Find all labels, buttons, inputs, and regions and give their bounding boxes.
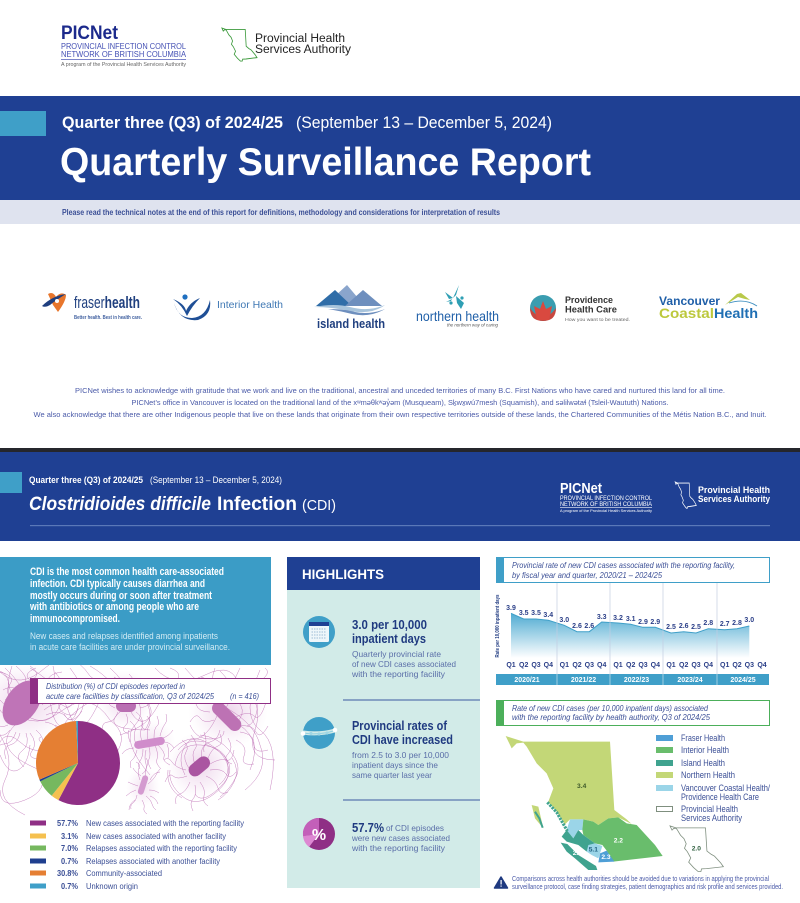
panel: CDI intro: in acute care facilities are under provincial surveillance. [30, 642, 230, 652]
logo: PICNet: PROVINCIAL INFECTION CONTROL [61, 41, 186, 51]
logo: Fraser Health: Better health. Best in health care. [74, 315, 143, 321]
quarter labels: Q3 [531, 662, 541, 669]
technical notes strip: Please read the technical notes at the end of this report for definitions, methodology and considerations for interpretation of results [62, 208, 500, 217]
cover banner [0, 96, 800, 200]
panel: CDI intro [0, 557, 271, 665]
legend row: community [30, 868, 162, 878]
logo: PHSA white: Provincial Health [698, 485, 770, 496]
region: Vancouver Island [561, 843, 597, 870]
quarter labels: Q4 [651, 662, 660, 669]
data labels: 2.6 [584, 623, 594, 630]
quarter labels: Q3 [638, 662, 648, 669]
legend: Fraser: Fraser Health [681, 733, 725, 743]
fiscal year bar: 2020/21 [514, 677, 540, 684]
legend row: unknown: 0.7% [61, 881, 78, 891]
quarter labels: Q2 [679, 662, 688, 669]
highlight: rate increase: inpatient days since the [352, 760, 438, 770]
region: Northern Health [506, 736, 632, 825]
legend row: new another: New cases associated with another facility [86, 831, 227, 841]
curls: lower right cell [164, 732, 236, 811]
legend row: community: Community-associated [86, 868, 162, 878]
fiscal year bar: 2021/22 [571, 677, 596, 684]
highlights heading: HIGHLIGHTS [302, 566, 384, 582]
line chart title: Provincial rate of new CDI cases associated with the reporting facility, [512, 560, 735, 570]
map labels: 2.3 [601, 854, 611, 861]
map labels: 2.3 [573, 850, 582, 857]
panel: CDI intro: mostly occurs during or soon after treatment [30, 590, 212, 602]
quarter labels: Q1 [506, 662, 516, 669]
data labels: 2.6 [679, 623, 689, 630]
legend: Northern: Northern Health [681, 770, 735, 780]
region: Fraser Health [598, 851, 614, 862]
legend: Interior: Interior Health [681, 745, 729, 755]
page divider [0, 448, 800, 452]
warning note [494, 874, 783, 891]
logo: PICNet white: PROVINCIAL INFECTION CONTROL [560, 496, 653, 502]
legend row: unknown [30, 881, 138, 891]
icon: trend line [301, 717, 337, 749]
logo: Provincial Health Services Authority: Services Authority [255, 44, 351, 56]
highlight: quarterly rate: 3.0 per 10,000 [352, 617, 427, 632]
legend row: relapse another [30, 856, 221, 866]
area chart [495, 583, 769, 685]
line chart title: by fiscal year and quarter, 2020/21 – 2024/25 [512, 570, 662, 580]
legend row: new another: 3.1% [61, 831, 78, 841]
region: Vancouver Coastal north [567, 819, 583, 838]
map: BC health authorities [506, 736, 723, 871]
panel: CDI intro: CDI is the most common health care-associated [30, 566, 224, 578]
panel: CDI intro: infection. CDI typically causes diarrhea and [30, 578, 205, 590]
quarter labels: Q3 [585, 662, 594, 669]
logo: Interior Health: Interior Health [217, 299, 283, 311]
quarter labels: Q4 [544, 662, 553, 669]
small map: PHSA: 2.0 [692, 845, 701, 852]
data labels: 2.5 [691, 624, 701, 631]
quarter labels: Q2 [732, 662, 742, 669]
area series [511, 613, 749, 658]
legend row: relapse reporting: 7.0% [61, 843, 78, 853]
legend row: relapse another: Relapses associated with another facility [86, 856, 221, 866]
curls: centre cell [122, 714, 174, 774]
logo: PHSA white: Services Authority [698, 494, 771, 505]
small map: PHSA [670, 826, 723, 871]
fiscal year bar: 2023/24 [677, 677, 703, 684]
map labels: 3.4 [577, 783, 587, 790]
y axis label: Rate per 10,000 inpatient days [495, 594, 501, 658]
section title: Clostridioides difficile [29, 494, 211, 515]
quarter labels: Q1 [666, 662, 676, 669]
technical notes strip [0, 200, 800, 224]
highlight: share of episodes: of CDI episodes [386, 823, 444, 833]
legend: Vancouver Coastal: Vancouver Coastal Health/ [681, 783, 770, 793]
quarter labels [506, 662, 767, 669]
highlight: quarterly rate: Quarterly provincial rate [352, 649, 441, 659]
panel: CDI intro: with antibiotics or among people who are [29, 601, 199, 613]
quarter labels: Q1 [613, 662, 623, 669]
curls: top cell [97, 674, 162, 734]
data labels: 3.2 [613, 615, 623, 622]
logo: PICNet white: A program of the Provincial Health Services Authority [560, 508, 652, 513]
highlight: share of episodes: were new cases associated [351, 833, 450, 843]
data labels: 3.5 [531, 610, 541, 617]
data labels: 3.4 [543, 612, 553, 619]
logo: Interior Health [173, 294, 283, 320]
highlight: rate increase [352, 718, 453, 780]
quarter line: Quarter three (Q3) of 2024/25 [29, 475, 143, 485]
quarter line [29, 475, 282, 485]
quarter labels: Q4 [704, 662, 713, 669]
region: Vancouver Coastal south [587, 843, 602, 858]
pie chart title [30, 678, 270, 704]
bacteria cells [0, 673, 244, 795]
cover banner: (September 13 – December 5, 2024) [296, 113, 552, 132]
quarter labels: Q3 [691, 662, 701, 669]
fiscal year bar: 2024/25 [730, 677, 756, 684]
legend: Island: Island Health [681, 758, 725, 768]
highlight: quarterly rate: inpatient days [352, 631, 426, 646]
line chart title [496, 557, 770, 583]
legend row: relapse reporting: Relapses associated with the reporting facility [86, 843, 238, 853]
logo: Vancouver Coastal Health: Health [714, 305, 758, 321]
data labels: 3.3 [597, 614, 607, 621]
data labels: 2.9 [638, 619, 648, 626]
legend row: unknown: Unknown origin [86, 881, 138, 891]
logo: Providence Health Care [530, 295, 630, 322]
icon: warning triangle [494, 877, 508, 888]
data labels: 3.0 [744, 617, 754, 624]
legend row: relapse reporting [30, 843, 238, 853]
legend row: new reporting: 57.7% [57, 818, 78, 828]
highlight: rate increase: Provincial rates of [352, 718, 448, 733]
logo: Fraser Health: fraserhealth [74, 293, 140, 312]
land acknowledgement [34, 386, 766, 419]
section title [29, 494, 336, 515]
pie legend [30, 818, 245, 891]
map labels [573, 783, 623, 861]
highlight: share of episodes [351, 820, 450, 853]
data labels: 2.6 [572, 623, 582, 630]
legend row: new another [30, 831, 227, 841]
logo: Fraser Health [42, 293, 143, 321]
highlight: quarterly rate: with the reporting facility [351, 669, 446, 679]
quarter labels: Q1 [560, 662, 569, 669]
quarter labels: Q3 [745, 662, 754, 669]
logo: Northern Health: northern health [416, 308, 499, 324]
data labels: 2.8 [732, 620, 742, 627]
highlight: quarterly rate: of new CDI cases associated [352, 659, 456, 669]
logo: PICNet: PICNet [61, 23, 119, 44]
region: Central coast Island Health [547, 802, 567, 831]
data labels: 3.1 [626, 616, 636, 623]
map labels: 2.2 [614, 837, 623, 844]
highlight: rate increase: same quarter last year [352, 770, 432, 780]
region: Haida Gwaii [532, 805, 543, 828]
highlights heading [287, 557, 480, 590]
panel: CDI intro: immunocompromised. [30, 613, 120, 625]
highlight: share of episodes: 57.7% [352, 820, 384, 835]
pie chart title: Distribution (%) of CDI episodes reported in [46, 681, 185, 691]
icon: percent pie [303, 818, 335, 850]
section title: Infection [217, 494, 297, 515]
logo: PICNet white: PICNet [560, 480, 602, 497]
data labels: 3.9 [506, 605, 516, 612]
panel: highlights [287, 557, 480, 888]
legend: Vancouver Coastal: Providence Health Care [681, 792, 759, 802]
legend row: new reporting [30, 818, 245, 828]
quarter labels: Q2 [626, 662, 635, 669]
soft density behind filaments [0, 661, 268, 807]
pie chart [36, 721, 120, 805]
bacteria background illustration [0, 659, 275, 815]
highlight: rate increase: CDI have increased [352, 732, 453, 747]
land acknowledgement: PICNet’s office in Vancouver is located on the traditional land of the xʷməθkʷəy̓əm (Musqueam), Sḵwx̱wú7mesh (Squamish), and səlilwətaɬ (Tsleil-Waututh) Nations. [132, 398, 668, 407]
logo: PICNet: NETWORK OF BRITISH COLUMBIA [61, 49, 186, 59]
fiscal year bar: 2022/23 [624, 677, 649, 684]
quarter labels: Q1 [720, 662, 729, 669]
legend: PHSA: Provincial Health [681, 804, 738, 814]
logo: Island Health: island health [317, 317, 385, 331]
quarter labels: Q4 [757, 662, 767, 669]
highlight: share of episodes: with the reporting facility [351, 843, 446, 853]
curls: bottom cell [126, 758, 160, 814]
region: Interior Health [582, 817, 663, 862]
logo: Providence Health Care: Providence [565, 295, 613, 305]
logo: Providence Health Care: Health Care [565, 304, 617, 314]
curls: right cell [186, 671, 268, 764]
map labels: 5.1 [589, 847, 598, 854]
cover banner: Quarterly Surveillance Report [60, 141, 591, 184]
logo: PICNet [61, 23, 186, 68]
legend row: new reporting: New cases associated with the reporting facility [86, 818, 245, 828]
quarter labels: Q4 [597, 662, 606, 669]
region: Island Health mainland [562, 830, 595, 852]
data labels: 2.9 [650, 619, 660, 626]
legend row: relapse another: 0.7% [61, 856, 78, 866]
land acknowledgement: PICNet wishes to acknowledge with gratitude that we work and live on the traditional, ancestral and unceded territories of many B.C. First Nations who have cared and nurtured this land for all time. [75, 386, 725, 395]
icon: percent pie: % [312, 827, 326, 844]
legend: PHSA: Services Authority [681, 813, 742, 823]
data labels [506, 605, 754, 631]
land acknowledgement: We also acknowledge that there are other Indigenous people that live on these lands that originate from their own respective territories outside of these lands, the Chartered Communities of the Métis Nation B.C., and Inuit. [34, 410, 766, 419]
logo: PICNet white [560, 480, 653, 513]
logo: Northern Health [416, 285, 499, 328]
cover banner: Quarter three (Q3) of 2024/25 [62, 113, 283, 132]
logo: PICNet white: NETWORK OF BRITISH COLUMBIA [560, 502, 652, 508]
data labels: 2.7 [720, 621, 730, 628]
data labels: 2.5 [666, 624, 676, 631]
icon: calendar [303, 616, 335, 648]
pie chart title: acute care facilities by classification, Q3 of 2024/25 [46, 691, 214, 701]
logo: Island Health [314, 285, 385, 331]
highlight: quarterly rate [351, 617, 456, 679]
logo: Vancouver Coastal Health: Vancouver [659, 294, 720, 308]
logo: PICNet: A program of the Provincial Health Services Authority [61, 62, 186, 68]
highlight: rate increase: from 2.5 to 3.0 per 10,000 [352, 750, 449, 760]
legend row: community: 30.8% [57, 868, 78, 878]
pie chart title: (n = 416) [230, 691, 259, 701]
map legend [656, 733, 770, 823]
data labels: 3.0 [559, 617, 569, 624]
logo: Northern Health: the northern way of caring [447, 322, 498, 328]
data labels: 2.8 [703, 620, 713, 627]
data labels: 3.5 [519, 610, 529, 617]
section title: (CDI) [302, 497, 336, 514]
logo: Provincial Health Services Authority [222, 28, 351, 61]
map title: Rate of new CDI cases (per 10,000 inpatient days) associated [512, 703, 708, 713]
logo: Vancouver Coastal Health: Coastal [659, 305, 714, 321]
quarter labels: Q2 [519, 662, 528, 669]
map title [496, 700, 770, 726]
quarter line: (September 13 – December 5, 2024) [150, 475, 282, 485]
logo: Providence Health Care: How you want to be treated. [565, 317, 630, 322]
legend: Vancouver Coastal [656, 783, 770, 802]
curls: left cell [0, 666, 82, 767]
logo: Vancouver Coastal Health [659, 293, 758, 321]
quarter labels: Q2 [572, 662, 582, 669]
logo: Provincial Health Services Authority: Provincial Health [255, 33, 345, 45]
legend: PHSA [656, 804, 742, 823]
logo: PHSA white [675, 482, 771, 508]
map title: with the reporting facility by health authority, Q3 of 2024/25 [512, 712, 710, 722]
panel: CDI intro: New cases and relapses identified among inpatients [30, 631, 218, 641]
section header [0, 452, 800, 541]
fiscal year bar [496, 674, 769, 685]
